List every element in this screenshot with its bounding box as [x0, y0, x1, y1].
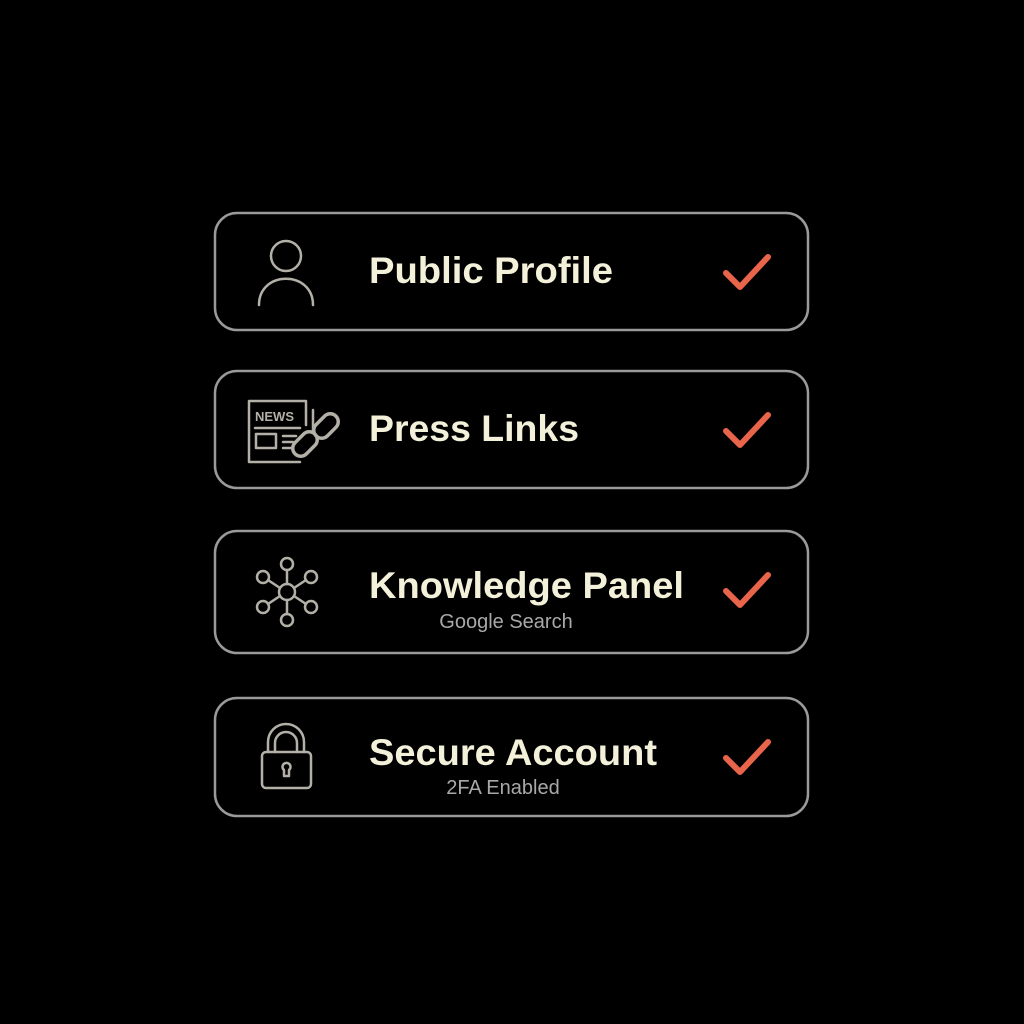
icon: check [726, 742, 768, 772]
card: press links [215, 371, 808, 488]
icon: network [257, 558, 317, 626]
card: public profile [215, 213, 808, 330]
icon: lock [262, 724, 311, 788]
card: knowledge panel [215, 531, 808, 653]
icon: check [726, 575, 768, 605]
card: secure account [215, 698, 808, 816]
icon: person [259, 241, 313, 305]
subtitle: 2FA Enabled [446, 777, 560, 799]
heading: public profile: Public Profile [369, 250, 613, 291]
icon: check [726, 257, 768, 287]
icon: news with link: NEWS [255, 409, 294, 424]
icon: news with link [249, 401, 342, 462]
icon: check [726, 415, 768, 445]
heading: secure account: Secure Account [369, 732, 657, 773]
heading: knowledge panel: Knowledge Panel [369, 565, 684, 606]
heading: press links: Press Links [369, 408, 579, 449]
subtitle: Google Search [439, 611, 573, 633]
